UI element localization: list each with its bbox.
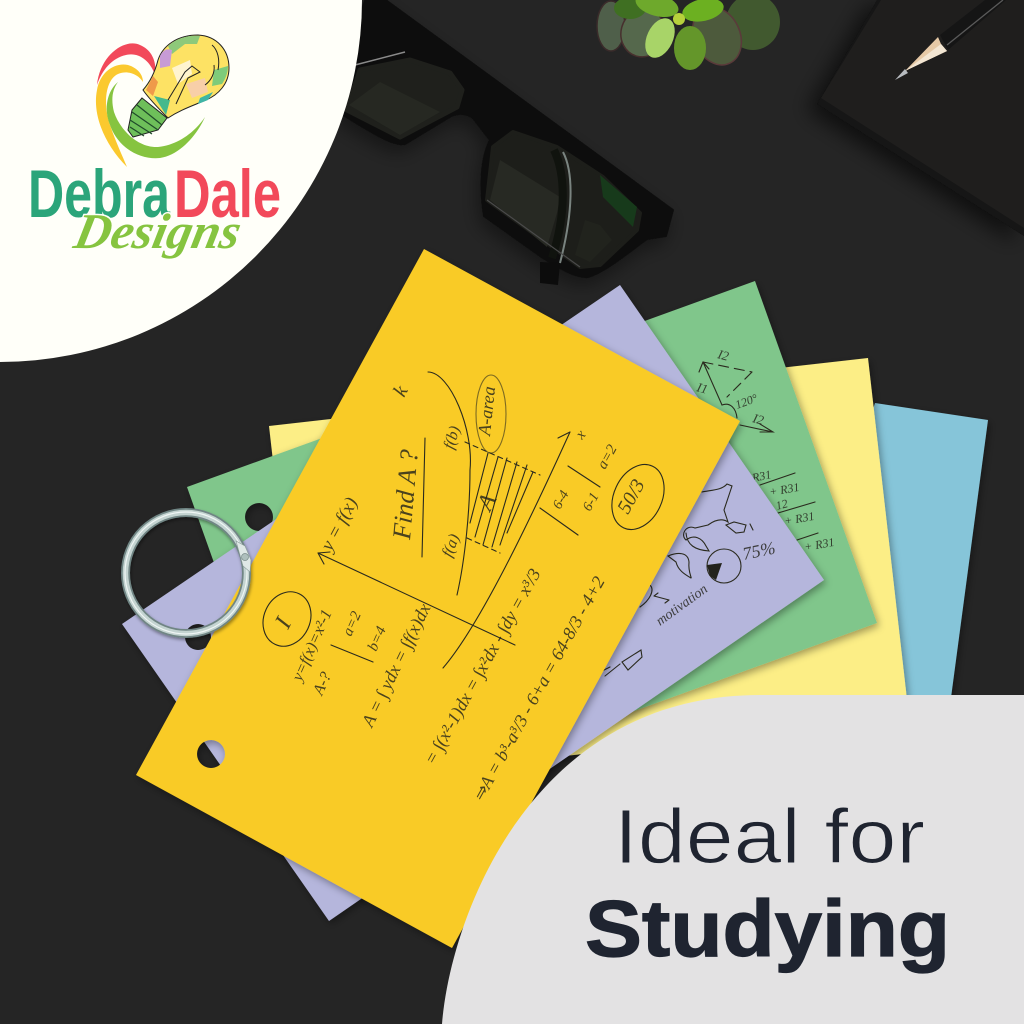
heading: Studying: Studying: [585, 884, 950, 973]
card: blue: [760, 403, 988, 780]
math handwriting: f(a): [439, 532, 463, 559]
notebook: [817, 0, 1024, 236]
math handwriting: I: [270, 613, 298, 634]
green card handwriting: I2: [750, 410, 766, 428]
green card handwriting: 12: [774, 496, 789, 513]
lavender card world map sketch: [600, 484, 777, 676]
math handwriting: = ∫(x²-1)dx = ∫x²dx - ∫dy = x³/3: [420, 565, 545, 768]
card: pale yellow: [269, 358, 909, 785]
green card handwriting: 120°: [733, 391, 760, 412]
pencil: [895, 0, 1006, 80]
green card handwriting: + R31: [768, 480, 800, 499]
math handwriting: x: [572, 427, 590, 443]
card: green: [187, 281, 877, 829]
lavender card world map sketch: 75%: [741, 537, 777, 564]
math handwriting: b=4: [365, 624, 390, 654]
math handwriting: k: [389, 381, 413, 400]
math handwriting: Find A ?: [387, 448, 424, 542]
math handwriting: y = f(x): [316, 494, 362, 556]
lavender card world map sketch: motivation: [654, 582, 711, 629]
logo wordmark: Designs: Designs: [69, 203, 246, 259]
green card handwriting: I1: [694, 379, 710, 397]
green card handwriting: + R31: [803, 535, 835, 554]
green card handwriting: + R31: [783, 509, 815, 528]
glasses: [340, 0, 673, 285]
card: yellow with math notes: [136, 249, 740, 948]
logo wordmark: DebraDale: Dale: [174, 156, 281, 232]
math handwriting: 50/3: [613, 476, 650, 517]
math handwriting: a=2: [340, 609, 365, 639]
math handwriting: f(b): [441, 424, 464, 451]
ring binder: [125, 512, 251, 634]
math handwriting: A-area: [474, 385, 499, 437]
math handwriting: 6-4: [550, 488, 573, 512]
math handwriting: ⇒A = b³-a³/3 - 6+a = 64-8/3 - 4+2: [468, 573, 609, 805]
math handwriting: A-?: [310, 670, 335, 699]
logo wordmark: DebraDale: Debra: [28, 156, 171, 232]
panel: headline corner: [442, 695, 1024, 1024]
logo swooshes: [96, 43, 205, 167]
logo light bulb icon: [128, 35, 229, 137]
math handwriting: y=f(x)=x²-1: [288, 607, 336, 685]
green card handwriting: I2: [715, 346, 731, 364]
green card handwriting: [694, 346, 835, 554]
logo panel: [0, 0, 362, 362]
math handwriting: a=2: [595, 442, 621, 472]
math handwriting: A: [471, 489, 502, 517]
plant: [597, 0, 780, 73]
heading: Ideal for: Ideal for: [614, 794, 925, 880]
green card handwriting: R31: [750, 467, 773, 485]
math handwriting: A = ∫ ydx = ∫f(x)dx: [357, 600, 435, 731]
card: lavender: [122, 285, 824, 921]
ring clasp: [236, 541, 251, 572]
math handwriting: [254, 372, 674, 805]
math handwriting: 6-1: [580, 490, 603, 514]
